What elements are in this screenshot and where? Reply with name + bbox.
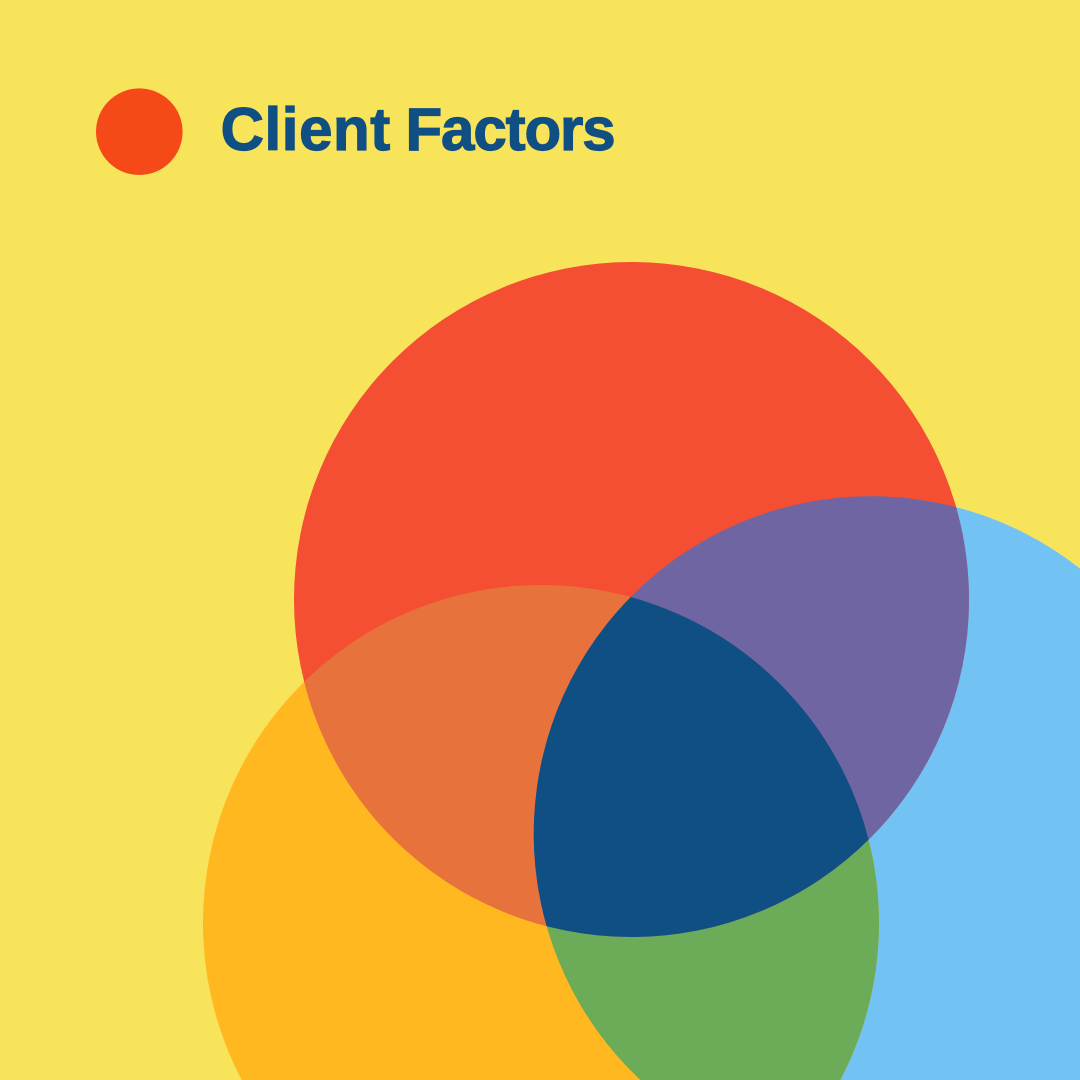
circle: red [294,262,969,937]
overlap: all three circles [534,597,868,937]
circle: orange [203,585,879,1080]
overlap: orange and blue [546,840,879,1080]
icon: title bullet dot [96,88,183,175]
title: Client [221,96,391,163]
circle: blue [534,496,1080,1080]
overlap: red and blue [534,496,969,937]
title: Factors [406,96,615,163]
venn diagram [203,262,1080,1080]
overlap: red and orange [304,585,866,937]
